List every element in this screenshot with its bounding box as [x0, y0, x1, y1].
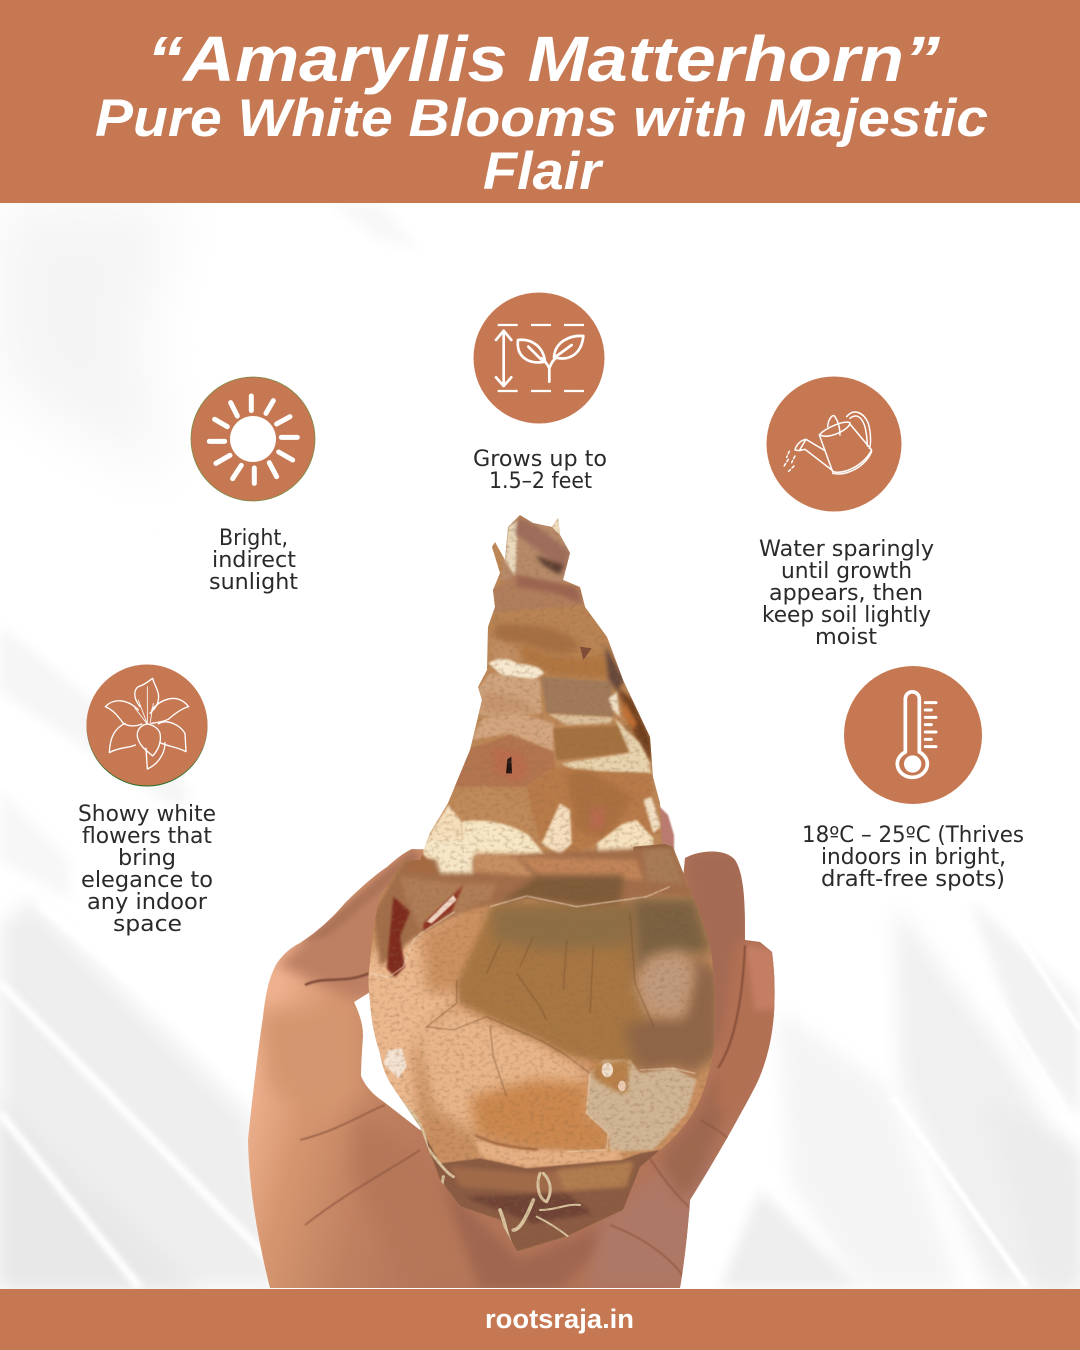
feature: flowers — [78, 664, 216, 937]
header banner — [0, 0, 1080, 203]
label: height: 1.5–2 feet — [489, 469, 592, 494]
label: flowers — [78, 802, 216, 937]
label: flowers: any indoor — [87, 890, 208, 915]
label: sunlight: Bright, — [219, 526, 288, 551]
footer banner — [0, 1289, 1080, 1350]
label: temperature: indoors in bright, — [821, 845, 1006, 870]
footer website: rootsraja.in — [485, 1304, 634, 1334]
subtitle line: Pure White Blooms with Majestic: Pure White Blooms with Majestic — [95, 89, 988, 148]
label: watering: until growth — [781, 559, 912, 584]
label: height: Grows up to — [473, 447, 607, 472]
label: watering — [759, 537, 934, 650]
icon: watering can — [766, 376, 902, 512]
bulb main body and collar — [347, 840, 727, 1252]
bulb upper neck layers — [420, 517, 673, 860]
subtitle line: Flair: Flair — [483, 142, 605, 201]
label: watering: moist — [815, 625, 877, 650]
finger sliver behind bulb neck — [658, 805, 674, 860]
label: temperature: 18ºC – 25ºC (Thrives — [802, 823, 1024, 848]
label: flowers: space — [113, 912, 182, 937]
photo: hand holding amaryllis bulb — [240, 510, 780, 1290]
label: sunlight: indirect — [212, 548, 296, 573]
label: watering: Water sparingly — [759, 537, 934, 562]
label: height — [473, 447, 607, 494]
label: flowers: bring — [118, 846, 176, 871]
label: temperature: draft-free spots) — [821, 867, 1005, 892]
label: temperature — [802, 823, 1024, 892]
bulb root plate — [397, 1097, 660, 1252]
icon: sun — [191, 377, 315, 501]
feature: sunlight — [191, 377, 315, 595]
icon: thermometer — [844, 666, 982, 804]
label: sunlight: sunlight — [209, 570, 298, 595]
bulb — [368, 515, 715, 1252]
label: flowers: elegance to — [81, 868, 213, 893]
label: sunlight — [209, 526, 298, 595]
label: watering: appears, then — [769, 581, 923, 606]
feature: height — [473, 292, 607, 494]
label: flowers: flowers that — [82, 824, 212, 849]
icon: plant with height arrow — [474, 292, 604, 424]
feature: temperature — [802, 666, 1024, 892]
hand — [240, 805, 780, 1290]
label: watering: keep soil lightly — [762, 603, 931, 628]
feature: watering — [759, 376, 934, 650]
title line: Amaryllis Matterhorn: “Amaryllis Matterhorn” — [147, 23, 940, 95]
icon: lily flower — [86, 664, 208, 786]
label: flowers: Showy white — [78, 802, 216, 827]
